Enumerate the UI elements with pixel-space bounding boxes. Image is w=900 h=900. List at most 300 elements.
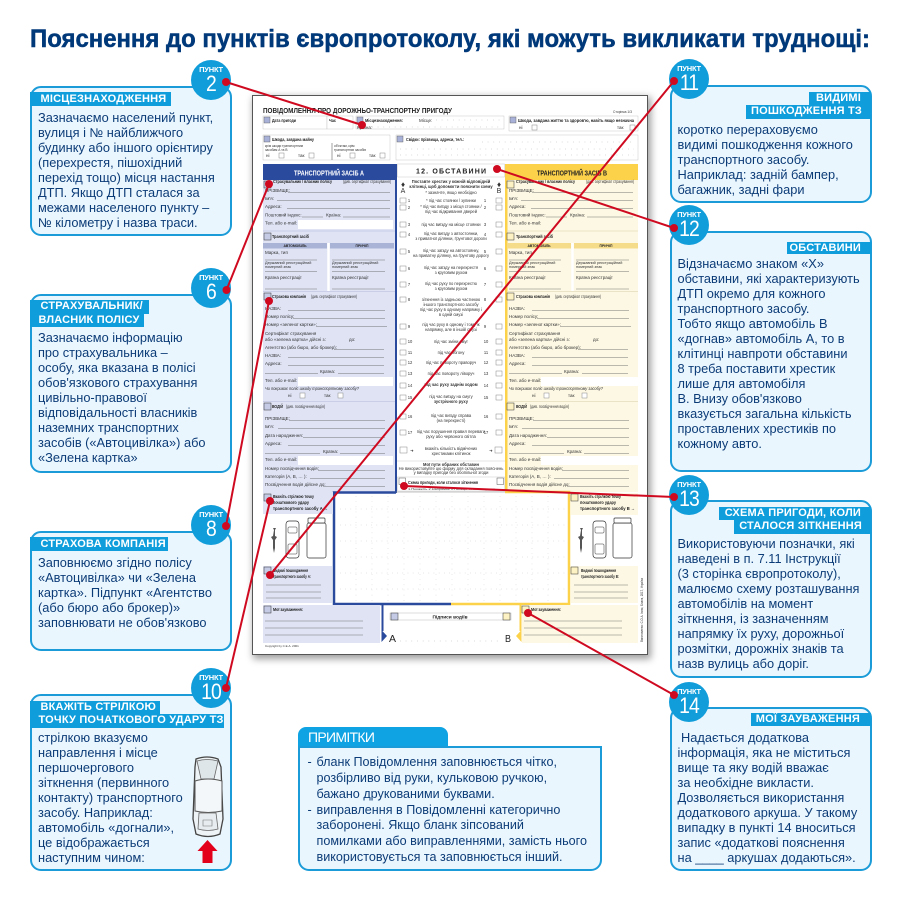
vehicle A column: ні bbox=[288, 393, 292, 398]
circumstances column: на приватну ділянку, на ґрунтову дорогу bbox=[413, 253, 490, 258]
circumstances column: 15 bbox=[408, 395, 413, 400]
form top fields: так bbox=[369, 153, 376, 158]
vehicle A column: до: bbox=[349, 337, 355, 342]
vehicle B column: Тел. або e-mail: bbox=[509, 457, 541, 462]
connector: пункт 14 bbox=[524, 609, 678, 699]
vehicle A column: ТРАНСПОРТНИЙ ЗАСІБ А bbox=[294, 168, 364, 178]
circumstances column: іншого транспортного засобу bbox=[423, 302, 479, 307]
field 15: driver signatures: Підписи водіїв bbox=[432, 614, 468, 620]
text: обставини: обставини, які характеризують bbox=[678, 270, 860, 286]
form top fields: Свідки: прізвища, адреси, тел.: bbox=[406, 137, 464, 142]
form top fields: крім шкоди транспортним bbox=[265, 144, 303, 148]
panel: точка початкового удару bbox=[30, 694, 232, 871]
vehicle A column: Тел. або e-mail: bbox=[265, 457, 297, 462]
heading: страхувальник: ВЛАСНИК ПОЛІСУ bbox=[38, 314, 140, 326]
vehicle A column: ПРИЧІП bbox=[356, 244, 369, 248]
vehicle B lower fields: impact point and damage bbox=[571, 493, 638, 603]
form heading: ПОВІДОМЛЕННЯ ПРО ДОРОЖНЬО-ТРАНСПОРТНУ ПРИГОДУ bbox=[263, 106, 452, 115]
panel: схема пригоди bbox=[670, 500, 872, 678]
badge: пункт 13 bbox=[669, 475, 709, 515]
vehicle A column: Номер посвідчення водія: bbox=[265, 466, 319, 471]
circumstances column: 14 bbox=[408, 383, 413, 388]
field 14: remarks of driver A: Copyright by С.Е.А. 2001 bbox=[265, 644, 299, 648]
vehicle A column: Агентство (або бюро, або брокер): bbox=[265, 345, 337, 350]
circumstances column: A bbox=[401, 188, 406, 195]
connector: пункт 8 bbox=[222, 297, 273, 530]
badge: пункт 11: 11 bbox=[680, 70, 698, 95]
connector: пункт 6 bbox=[222, 180, 273, 294]
circumstances column: під час руху в одному і тому ж bbox=[422, 322, 480, 327]
circumstances column: вкажіть кількість відмічених bbox=[425, 446, 477, 451]
vehicle B column: або «зелена картка» дійсні з: bbox=[509, 336, 570, 342]
vehicle A column: Транспортний засіб bbox=[272, 233, 309, 239]
badge: пункт 2: 2 bbox=[206, 71, 216, 96]
vehicle B column: Тел. або e-mail: bbox=[509, 220, 541, 226]
text: обставини: кожному авто. bbox=[678, 436, 762, 450]
circumstances column: ➔ bbox=[410, 448, 414, 453]
note one: бажано друкованими буквами. bbox=[316, 787, 495, 801]
vehicle A column: Страхова компанія bbox=[272, 294, 306, 299]
tab: примітки bbox=[298, 727, 448, 747]
vehicle B column: Номер посвідчення водія: bbox=[509, 466, 563, 471]
vehicle A column: НАЗВА: bbox=[265, 353, 281, 358]
circumstances column: під час руху в одному напрямку і bbox=[420, 307, 482, 312]
vehicle A column: Країна реєстрації bbox=[332, 275, 369, 280]
vehicle B column: НАЗВА: bbox=[509, 306, 525, 311]
vehicle B column: Тел. або e-mail: bbox=[509, 378, 541, 383]
circumstances column: під час виїзду справа bbox=[431, 413, 472, 418]
form top fields: Шкода, завдана майну bbox=[272, 136, 314, 142]
vehicle B column: Країна: bbox=[567, 449, 582, 454]
circumstances column: під час виїзду з автостоянки, bbox=[424, 231, 478, 236]
badge: пункт 13: 13 bbox=[679, 486, 699, 511]
form top fields: ні bbox=[337, 153, 340, 158]
circumstances column: під час порушення правил переваги bbox=[417, 429, 485, 434]
note two: заборонені. Якщо бланк зіпсований bbox=[316, 818, 524, 832]
vehicle A lower fields: impact point and damage bbox=[263, 492, 333, 603]
text: точка початкового удару: наступним чином: bbox=[38, 850, 145, 865]
note two: виправлення в Повідомленні категорично bbox=[316, 802, 560, 816]
vehicle A column: Адреса: bbox=[265, 204, 282, 209]
badge: пункт 8: 8 bbox=[206, 516, 216, 541]
text: видимі пошкодження: Наприклад: задній бампер, bbox=[678, 166, 839, 182]
vehicle A column: або «зелена картка» дійсні з: bbox=[265, 336, 326, 342]
circumstances column bbox=[397, 164, 505, 475]
text: точка початкового удару: контакту) транспортного bbox=[38, 790, 183, 805]
heading: страхувальник: СТРАХУВАЛЬНИК/ bbox=[40, 300, 143, 312]
vehicle B column: Адреса: bbox=[509, 441, 526, 446]
circumstances column: під час повороту праворуч bbox=[426, 360, 476, 365]
text: обставини: В. Внизу обов'язково bbox=[678, 390, 802, 406]
circumstances column: під час руху по перехрестю bbox=[425, 281, 477, 286]
connector: пункт 2 bbox=[222, 78, 366, 129]
vehicle A column: (див. сертифікат страхування) bbox=[311, 294, 357, 299]
vehicle A column: Дата народження: bbox=[265, 433, 303, 438]
heading: точка початкового удару: ВКАЖІТЬ СТРІЛКОЮ bbox=[40, 700, 156, 712]
circumstances column: 10 bbox=[408, 339, 413, 344]
text: точка початкового удару: автомобіль «догнали», bbox=[38, 820, 174, 835]
vehicle A column: Сертифікат страхування bbox=[265, 331, 317, 336]
form top fields: Сторінка 1/3 bbox=[613, 110, 632, 114]
circumstances column: 1 bbox=[408, 198, 411, 203]
text: мої зауваження: запис «додаткові пояснення bbox=[678, 834, 845, 850]
vehicle A column: ВОДІЙ bbox=[272, 402, 283, 409]
circumstances column: 17 bbox=[408, 430, 413, 435]
vehicle A column: Ім'я: bbox=[265, 424, 274, 429]
form top fields: так bbox=[298, 153, 305, 158]
vehicle B column: Страхова компанія bbox=[516, 294, 550, 299]
vehicle B column: Країна: bbox=[564, 369, 579, 374]
text: точка початкового удару: засобу. Наприклад: bbox=[38, 805, 153, 820]
vehicle B column: номерний знак bbox=[509, 265, 535, 269]
circumstances column: 17 bbox=[484, 430, 489, 435]
circumstances column: 11 bbox=[484, 350, 489, 355]
heading: видимі пошкодження bbox=[746, 92, 871, 119]
text: точка початкового удару: стрілкою вказуємо bbox=[38, 730, 148, 745]
vehicle B column: Страхувальник / власник полісу bbox=[516, 179, 575, 184]
heading: місцезнаходження: МІСЦЕЗНАХОДЖЕННЯ bbox=[40, 93, 166, 105]
vehicle A column: Тел. або e-mail: bbox=[265, 220, 297, 226]
circumstances column: руху або червоного світла bbox=[426, 434, 477, 439]
heading: страхувальник bbox=[30, 300, 149, 327]
text: страхувальник: засобів («Автоцивілка») або bbox=[38, 434, 206, 450]
panel: мої зауваження bbox=[670, 707, 872, 871]
vehicle B column: Сертифікат страхування bbox=[509, 331, 561, 336]
text: обставини: вказується загальна кількість bbox=[678, 406, 852, 420]
field 13: sketch title bar bbox=[398, 477, 504, 491]
vehicle A lower fields: impact point and damage: транспортного засобу А → bbox=[273, 505, 328, 511]
text: точка початкового удару bbox=[38, 730, 183, 865]
vehicle A column: Адреса: bbox=[265, 441, 282, 446]
vehicle B column: Адреса: bbox=[509, 204, 526, 209]
text: обставини: клітинці навпроти обставини bbox=[678, 346, 847, 360]
text: мої зауваження: випадку в пункті 14 вноситься bbox=[678, 820, 856, 834]
heading: мої зауваження: МОЇ ЗАУВАЖЕННЯ bbox=[756, 713, 860, 725]
badge: пункт 6: 6 bbox=[206, 279, 216, 304]
heading: видимі пошкодження: ВИДИМІ bbox=[816, 92, 861, 104]
notes box bbox=[298, 746, 602, 871]
text: страхувальник: цивільно-правової bbox=[38, 390, 147, 404]
text: схема пригоди: розмітки, дорожніх знаків та bbox=[678, 640, 844, 656]
vehicle A column: Категорія (А, В, … ): bbox=[265, 474, 307, 479]
circumstances column: 8 bbox=[408, 297, 411, 302]
form top fields: засобам А та В bbox=[265, 148, 287, 152]
circumstances column: 8 bbox=[484, 297, 487, 302]
note one: розбірливо від руки, кульковою ручкою, bbox=[316, 771, 547, 785]
form top fields: об'єктам, крім bbox=[334, 144, 354, 148]
field 13: sketch title bar: 1.Покажіть 2.Напрямок 3.Позиції 4.Назви вулиць bbox=[408, 487, 497, 491]
heading: схема пригоди: СХЕМА ПРИГОДИ, КОЛИ bbox=[725, 506, 861, 518]
text: обставини bbox=[678, 256, 860, 450]
text: страхова компанія: заповнювати не обов'язково bbox=[38, 614, 207, 630]
text: страхова компанія: (або бюро або брокер)» bbox=[38, 600, 180, 614]
heading: схема пригоди: СТАЛОСЯ ЗІТКНЕННЯ bbox=[739, 520, 862, 532]
vehicle A column: Поштовий індекс: bbox=[265, 212, 302, 218]
circumstances column: 9 bbox=[408, 324, 411, 329]
heading: точка початкового удару: ТОЧКУ ПОЧАТКОВОГО УДАРУ ТЗ bbox=[38, 714, 224, 726]
vehicle B column: номерний знак bbox=[576, 265, 602, 269]
vehicle A column: Країна реєстрації bbox=[265, 275, 302, 280]
badge: пункт 12 bbox=[669, 205, 709, 245]
connector: пункт 11 bbox=[266, 77, 678, 579]
circumstances column: 13 bbox=[408, 371, 413, 376]
text: місцезнаходження: ДТП. Якщо ДТП сталася за bbox=[38, 184, 200, 200]
form top fields: Місцезнаходження: bbox=[365, 118, 403, 123]
vehicle B column: до: bbox=[593, 337, 599, 342]
circumstances column: 1 bbox=[484, 198, 487, 203]
vehicle B lower fields: impact point and damage: транспортного засобу В → bbox=[580, 505, 635, 511]
heading: страхова компанія: СТРАХОВА КОМПАНІЯ bbox=[40, 538, 166, 550]
vehicle A column: (див. посвідчення водія) bbox=[286, 404, 325, 409]
vehicle B column: (див. посвідчення водія) bbox=[530, 404, 569, 409]
text: схема пригоди: зіткнення, із зазначенням bbox=[678, 610, 829, 626]
text: страхувальник bbox=[38, 330, 206, 464]
vehicle B column: ПРИЧІП bbox=[600, 244, 613, 248]
heading: точка початкового удару bbox=[30, 700, 224, 728]
form top fields: так bbox=[617, 125, 624, 130]
vehicle B lower fields: impact point and damage: транспортного засобу В: bbox=[581, 573, 619, 579]
vehicle A column: Марка, тип bbox=[265, 250, 288, 255]
badge: пункт 10 bbox=[191, 668, 231, 708]
badge: пункт 2: ПУНКТ bbox=[199, 65, 223, 74]
circumstances column: B bbox=[497, 188, 502, 195]
vehicle B column: Транспортний засіб bbox=[516, 233, 553, 239]
circumstances column: 3 bbox=[484, 222, 487, 227]
text: страхувальник: «Зелена картка» bbox=[38, 450, 138, 464]
circumstances column: під час заїзду на автостоянку, bbox=[423, 248, 479, 253]
vehicle B column: Поштовий індекс: bbox=[509, 212, 546, 218]
vehicle B column: Чи покриває поліс шкоду транспортному засобу? bbox=[509, 386, 603, 391]
vehicle B lower fields: impact point and damage: Вкажіть стрілкою точку bbox=[580, 494, 621, 499]
text: страхова компанія: картка». Підпункт «Агентство bbox=[38, 584, 212, 600]
circumstances column: ➔ bbox=[489, 448, 493, 453]
vehicle B lower fields: impact point and damage: Видимі пошкодження bbox=[581, 568, 616, 573]
circumstances column: (на перехресті) bbox=[437, 418, 466, 423]
field 15: driver signatures: B bbox=[505, 634, 511, 645]
badge: пункт 8: ПУНКТ bbox=[199, 510, 223, 519]
vehicle B column: АВТОМОБІЛЬ bbox=[527, 244, 551, 248]
vehicle A column: Номер полісу: bbox=[265, 314, 294, 319]
vehicle B column: Номер «зеленої картки»: bbox=[509, 322, 561, 327]
vehicle A column: ПРІЗВИЩЕ: bbox=[265, 188, 290, 193]
text: видимі пошкодження: коротко перераховуємо bbox=[678, 122, 818, 136]
vehicle A column: Державний реєстраційний bbox=[265, 261, 311, 265]
circumstances column: під час виїзду на місце стоянки bbox=[421, 222, 481, 227]
field 14: remarks of driver B bbox=[522, 605, 638, 643]
vehicle A column: так bbox=[324, 393, 331, 398]
text: точка початкового удару: зіткнення (первинного bbox=[38, 775, 169, 790]
text: схема пригоди: автомобілів на момент bbox=[678, 596, 813, 610]
circumstances column: напрямку, але в іншій смузі bbox=[425, 327, 477, 332]
circumstances column: 9 bbox=[484, 324, 487, 329]
text: місцезнаходження bbox=[38, 110, 215, 230]
circumstances column: 15 bbox=[484, 395, 489, 400]
text: схема пригоди: наведені в п. 7.11 Інструкції bbox=[678, 550, 841, 566]
text: видимі пошкодження bbox=[678, 122, 853, 196]
vehicle B column: Країна: bbox=[570, 212, 585, 218]
text: схема пригоди bbox=[678, 536, 859, 670]
vehicle B column: Країна реєстрації bbox=[576, 275, 613, 280]
vehicle A column: Країна: bbox=[326, 212, 341, 218]
circumstances column: 13 bbox=[484, 371, 489, 376]
text: страхова компанія bbox=[38, 554, 212, 630]
badge: пункт 11: ПУНКТ bbox=[677, 64, 701, 73]
vehicle A column: Номер «зеленої картки»: bbox=[265, 322, 317, 327]
text: страхувальник: відповідальності власників bbox=[38, 404, 197, 420]
text: мої зауваження: інформація, яка не міститься bbox=[678, 744, 850, 760]
vehicle A lower fields: impact point and damage: транспортного засобу А: bbox=[273, 573, 311, 579]
vehicle A column: АВТОМОБІЛЬ bbox=[283, 244, 307, 248]
form top fields: ні bbox=[519, 125, 522, 130]
text: мої зауваження: на ____ аркушах додаються». bbox=[678, 850, 856, 864]
vehicle A column: номерний знак bbox=[265, 265, 291, 269]
badge: пункт 12: ПУНКТ bbox=[677, 210, 701, 219]
vehicle B column: ПРІЗВИЩЕ: bbox=[509, 188, 534, 193]
circumstances column: під час зміни смуг bbox=[434, 339, 468, 344]
circumstances column: під час відкривання дверей bbox=[425, 209, 477, 214]
connector: пункт 13 bbox=[400, 482, 678, 501]
form top fields: Шкода, завдана життю та здоров'ю, навіть якщо незначна bbox=[518, 118, 634, 123]
text: точка початкового удару: першочергового bbox=[38, 760, 134, 775]
vehicle A column: Країна: bbox=[323, 449, 338, 454]
vehicle B column: Державний реєстраційний bbox=[576, 261, 622, 265]
vehicle B column: ПРІЗВИЩЕ: bbox=[509, 416, 534, 421]
text: обставини: ДТП окремо для кожного bbox=[678, 286, 826, 300]
vehicle B column: ні bbox=[532, 393, 536, 398]
circumstances column: 5 bbox=[484, 249, 487, 254]
circumstances column: 6 bbox=[484, 266, 487, 271]
circumstances column: 2 bbox=[408, 205, 411, 210]
connector: пункт 12 bbox=[493, 165, 678, 232]
circumstances column: 14 bbox=[484, 383, 489, 388]
heading: видимі пошкодження: ПОШКОДЖЕННЯ ТЗ bbox=[751, 105, 862, 117]
text: точка початкового удару: направлення і місце bbox=[38, 745, 158, 760]
vehicle A lower fields: impact point and damage: початкового удару bbox=[273, 500, 309, 505]
circumstances column: 12 bbox=[484, 360, 489, 365]
circumstances column: 4 bbox=[484, 232, 487, 237]
form top fields: Час bbox=[329, 118, 336, 123]
text: місцезнаходження: (перехрестя, пішохідний bbox=[38, 154, 182, 170]
vehicle B column: Категорія (А, В, … ): bbox=[509, 474, 551, 479]
circumstances column: у випадку пригоди без обопільної згоди bbox=[414, 470, 488, 475]
badge: пункт 14: ПУНКТ bbox=[677, 687, 701, 696]
circumstances column: 7 bbox=[408, 282, 411, 287]
circumstances column: зіткнення із задньою частиною bbox=[422, 297, 480, 302]
text: місцезнаходження: № кілометру і назва траси. bbox=[38, 214, 198, 230]
heading: схема пригоди bbox=[719, 506, 871, 534]
vehicle A column: НАЗВА: bbox=[265, 306, 281, 311]
circumstances column: під час обгону bbox=[438, 350, 465, 355]
text: місцезнаходження: межами населеного пункту – bbox=[38, 200, 209, 214]
text: мої зауваження: вище та яку водій вважає bbox=[678, 760, 829, 774]
circumstances column: 4 bbox=[408, 232, 411, 237]
circumstances column: 16 bbox=[484, 414, 489, 419]
text: обставини: транспортного засобу. bbox=[678, 300, 809, 316]
circumstances column: 10 bbox=[484, 339, 489, 344]
text: обставини: лише для автомобіля bbox=[678, 376, 805, 390]
badge: пункт 11 bbox=[669, 59, 709, 99]
circumstances column: хрестиками клітинок bbox=[432, 451, 471, 456]
circumstances column: Поставте хрестик у кожній відповідній bbox=[412, 179, 491, 184]
note two bbox=[308, 802, 587, 864]
text: страхова компанія: Заповнюємо згідно полісу bbox=[38, 554, 192, 570]
circumstances column: під час виїзду на смугу bbox=[429, 394, 474, 399]
badge: пункт 13: ПУНКТ bbox=[677, 480, 701, 489]
vertical printer imprint: Виготовлено: С.О.А. Ізюм, Бланк, 2017, Україна bbox=[640, 578, 644, 642]
form top fields: Дата пригоди bbox=[272, 118, 296, 123]
circumstances column: клітинці, щоб допомогти пояснити схему bbox=[409, 184, 493, 189]
circumstances column: з приватної ділянки, ґрунтової дороги bbox=[415, 236, 487, 241]
vehicle A column: ПРІЗВИЩЕ: bbox=[265, 416, 290, 421]
circumstances column: 16 bbox=[408, 414, 413, 419]
form top fields: ні bbox=[266, 153, 270, 158]
text: мої зауваження: Дозволяється використання bbox=[678, 790, 844, 804]
text: схема пригоди: (3 сторінка європротоколу), bbox=[678, 566, 841, 580]
text: видимі пошкодження: видимі пошкодження кожного bbox=[678, 136, 853, 152]
connector: пункт 10 bbox=[222, 497, 274, 692]
note one bbox=[308, 755, 557, 801]
field 14: remarks of driver A bbox=[263, 605, 380, 648]
badge: пункт 2 bbox=[191, 60, 231, 100]
text: обставини: 8 треба поставити хрестик bbox=[678, 360, 835, 376]
circumstances column: 6 bbox=[408, 266, 411, 271]
text: схема пригоди: малюємо схему розташування bbox=[678, 580, 859, 596]
field 13: accident sketch grid bbox=[334, 492, 569, 604]
circumstances column: з круговим рухом bbox=[435, 286, 467, 291]
vehicle A column: номерний знак bbox=[332, 265, 358, 269]
badge: пункт 14 bbox=[669, 682, 709, 722]
badge: пункт 8 bbox=[191, 505, 231, 545]
circumstances column: 7 bbox=[484, 282, 487, 287]
circumstances column: * зазначте, якщо необхідно bbox=[425, 190, 477, 195]
vehicle B column: Марка, тип bbox=[509, 250, 532, 255]
circumstances column: 3 bbox=[408, 222, 411, 227]
text: видимі пошкодження: багажник, задні фари bbox=[678, 182, 804, 196]
note two: використовується та заповнюється інший. bbox=[316, 850, 563, 864]
circumstances column: під час заїзду на перехрестя bbox=[424, 265, 478, 270]
panel: примітки bbox=[298, 727, 602, 871]
vehicle B column: Країна реєстрації bbox=[509, 275, 546, 280]
circumstances column: 12. ОБСТАВИНИ bbox=[416, 168, 486, 176]
vehicle A column: Страхувальник / власник полісу bbox=[273, 179, 332, 184]
field 13: sketch title bar: Схема пригоди, коли сталося зіткнення bbox=[408, 480, 478, 485]
vehicle B column: ТРАНСПОРТНИЙ ЗАСІБ В bbox=[537, 168, 607, 178]
panel: обставини bbox=[670, 231, 872, 472]
note one: бланк Повідомлення заповнюється чітко, bbox=[316, 755, 557, 769]
text: місцезнаходження: будинку або іншого орієнтиру bbox=[38, 140, 213, 154]
vehicle A column bbox=[263, 164, 397, 493]
circumstances column: 11 bbox=[408, 350, 413, 355]
circumstances column: ♦ bbox=[401, 180, 405, 189]
text: місцезнаходження: Зазначаємо населений пункт, bbox=[38, 110, 213, 124]
circumstances column: 12 bbox=[408, 360, 413, 365]
vehicle B column: Ім'я: bbox=[509, 196, 518, 201]
text: точка початкового удару: це відображається bbox=[38, 835, 150, 850]
badge: пункт 10: ПУНКТ bbox=[199, 673, 223, 682]
text: схема пригоди: напрямку їх руху, дорожньої bbox=[678, 626, 844, 640]
vehicle A column: Посвідчення водія дійсне до: bbox=[265, 481, 326, 487]
text: обставини: «догнав» автомобіль А, то в bbox=[678, 330, 845, 346]
text: мої зауваження: Надається додаткова bbox=[681, 730, 809, 744]
text: обставини: проставлених хрестиків по bbox=[678, 420, 836, 436]
panel: видимі пошкодження bbox=[670, 85, 872, 203]
vehicle A column: Ім'я: bbox=[265, 196, 274, 201]
circumstances column: Мої пути обраних обставин bbox=[423, 462, 479, 467]
form top fields bbox=[263, 110, 638, 160]
text: обставини: Відзначаємо знаком «Х» bbox=[678, 256, 824, 270]
note two: - bbox=[308, 802, 312, 816]
text: обставини: Тобто якщо автомобіль В bbox=[678, 316, 828, 330]
